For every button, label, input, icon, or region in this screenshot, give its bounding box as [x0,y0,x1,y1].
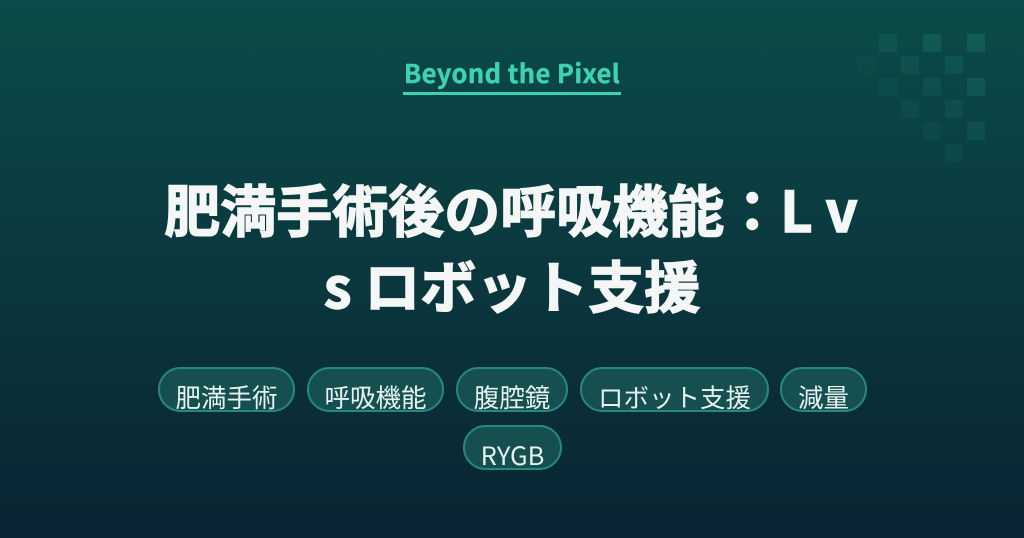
title: s ロボット支援 [324,244,700,325]
tag: 呼吸機能 [307,367,444,412]
tag: RYGB [463,425,562,470]
tag: ロボット支援 [580,367,769,412]
tag: 肥満手術 [158,367,295,412]
tag: RYGB: RYGB [481,436,544,473]
title [164,168,874,325]
tag: 腹腔鏡 [456,367,568,412]
brand label: Beyond the Pixel: Beyond the Pixel [404,54,620,91]
tag: 呼吸機能: 呼吸機能 [324,378,426,415]
tag: 腹腔鏡: 腹腔鏡 [474,378,550,415]
tag: 減量: 減量 [798,378,849,415]
tag: 肥満手術: 肥満手術 [175,378,278,415]
title: 肥満手術後の呼吸機能：Lv [164,168,874,249]
tag: ロボット支援: ロボット支援 [598,378,751,415]
tag: 減量 [780,367,867,412]
